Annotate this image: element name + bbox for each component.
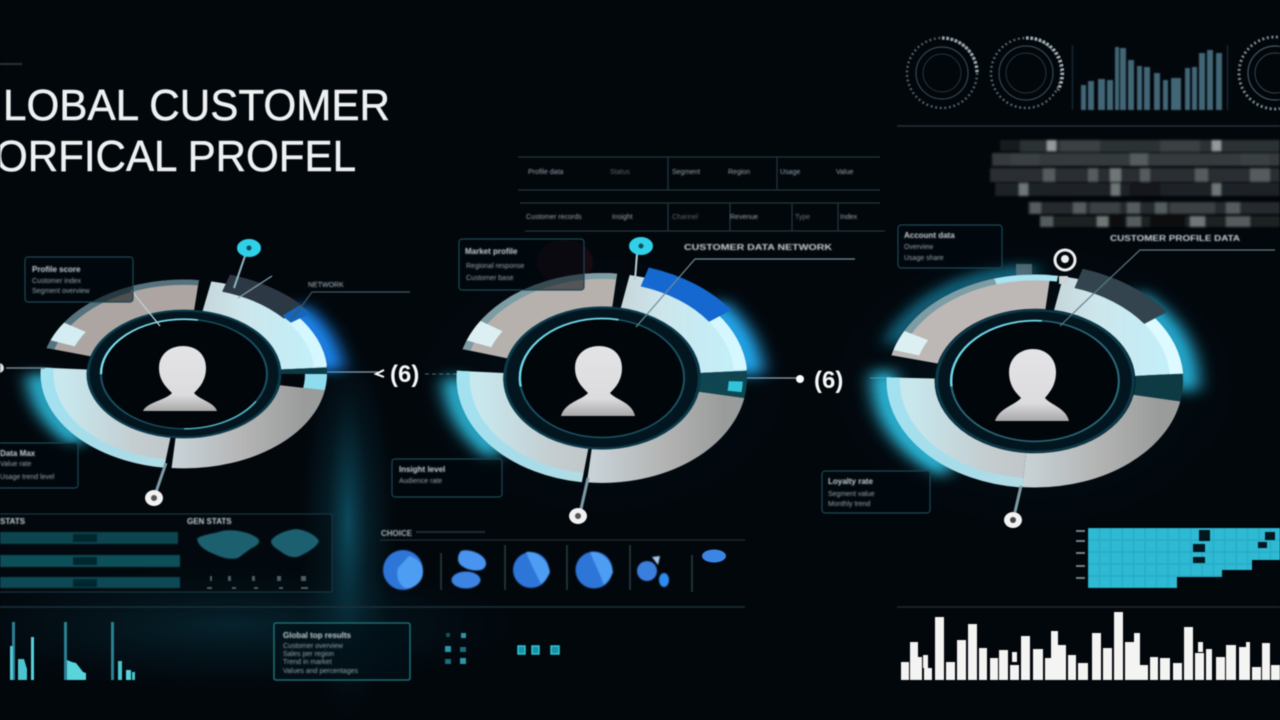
callout: bottom summary: Values and percentages [283, 668, 358, 675]
callout: bottom summary: Trend in market [283, 659, 332, 666]
title: ORFICAL PROFEL [0, 132, 356, 181]
gauge 3 [1239, 37, 1280, 109]
callout: ring 1 top: Segment overview [32, 288, 91, 295]
callout: bottom summary: Global top results [283, 631, 352, 640]
histogram 2 [64, 622, 86, 680]
callout: ring 3 bottom [822, 471, 930, 513]
pie 2 [452, 550, 486, 588]
histogram 3 [111, 622, 135, 680]
callout: bottom summary [274, 623, 410, 680]
centre data table: Index [840, 214, 858, 221]
centre data table: Value [836, 169, 853, 176]
callout: ring 2 top: Market profile [465, 247, 518, 256]
small icon grid [445, 633, 466, 664]
callout: ring 1 bottom [0, 443, 78, 488]
title: LOBAL CUSTOMER [3, 81, 390, 130]
callout: ring 1 bottom: Usage trend level [0, 474, 55, 481]
teal grid chart [1076, 528, 1280, 588]
pie 5 fragments [637, 556, 669, 587]
glow arcs [454, 271, 750, 485]
divider: lower right [897, 606, 1280, 608]
panel: blue segment pies: CHOICE [381, 529, 413, 538]
histogram 1 [10, 622, 34, 680]
centre data table: Insight [612, 214, 633, 221]
glow arcs [38, 278, 330, 470]
top right gauges and bar chart [897, 37, 1280, 126]
pie 3 [513, 552, 550, 588]
label: ring 3 heading: CUSTOMER PROFILE DATA [1110, 234, 1240, 243]
callout: ring 3 top: Usage share [904, 255, 944, 262]
centre data table: Type [795, 214, 810, 221]
callout: ring 2 top: Customer base [466, 275, 514, 282]
callout: ring 1 top: Customer index [32, 278, 82, 285]
callout: ring 2 top: Regional response [466, 263, 524, 270]
world map blobs [197, 529, 319, 559]
small histograms [10, 622, 135, 680]
pie 1 [383, 550, 423, 590]
cyan square icons [518, 646, 559, 654]
centre data table: Revenue [730, 214, 758, 221]
callout: ring 1 top [25, 257, 133, 302]
pins [1004, 250, 1275, 528]
pixel heatmap [990, 140, 1280, 227]
horizontal bars [0, 532, 180, 588]
callout: ring 3 bottom: Monthly trend [828, 501, 871, 508]
panel: demographics bars and map: STATS [0, 517, 26, 526]
pie 6 [702, 550, 726, 562]
callout: ring 3 bottom: Loyalty rate [828, 477, 873, 486]
centre data table: Region [728, 169, 750, 176]
callout: ring 3 bottom: Segment value [828, 491, 875, 498]
label: network: NETWORK [308, 282, 344, 289]
white bar chart [901, 612, 1280, 680]
callout: ring 3 top [898, 225, 1002, 268]
bar chart [1072, 45, 1228, 110]
panel: demographics bars and map: GEN STATS [187, 517, 232, 526]
panel: blue segment pies [380, 529, 745, 592]
person icon [143, 346, 217, 411]
connector: first to second profile: (6) [390, 361, 419, 388]
callout: ring 2 bottom: Insight level [399, 465, 445, 474]
callout: ring 2 top [459, 239, 584, 290]
callout: ring 1 bottom: Data Max [0, 449, 36, 458]
panel: demographics bars and map [0, 514, 332, 592]
label: ring 2 heading: CUSTOMER DATA NETWORK [684, 243, 832, 252]
divider: lower left [0, 606, 745, 608]
gauge 1 [907, 38, 977, 108]
callout: ring 3 top: Overview [904, 244, 934, 251]
connector: second to third profile: (6) [814, 367, 843, 394]
title [0, 63, 390, 181]
callout: ring 1 bottom: Value rate [0, 461, 31, 468]
person icon [995, 349, 1069, 421]
callout: bottom summary: Customer overview [283, 643, 344, 650]
centre data table: Channel [672, 214, 699, 221]
centre data table: Customer records [526, 214, 582, 221]
centre data table: Status [610, 169, 630, 176]
centre data table: Profile data [528, 169, 564, 176]
callout: ring 2 bottom: Audience rate [399, 478, 442, 485]
profile ring 3 [884, 234, 1275, 528]
centre data table: Usage [780, 169, 800, 176]
profile ring 2 [454, 237, 855, 524]
person icon [561, 346, 635, 416]
callout: ring 3 top: Account data [904, 231, 955, 240]
callout: ring 2 bottom [392, 459, 502, 497]
pie 4 [576, 552, 613, 588]
connector: second to third profile [735, 367, 888, 394]
glow arcs [884, 272, 1186, 490]
callout: bottom summary: Sales per region [283, 651, 334, 658]
centre data table [518, 157, 885, 231]
centre data table: Segment [672, 169, 700, 176]
callout: ring 1 top: Profile score [32, 265, 81, 274]
connector: first to second profile [283, 361, 457, 388]
profile ring 1 [0, 239, 410, 506]
gauge 2 [991, 38, 1062, 108]
pins [569, 237, 855, 524]
pins [0, 239, 410, 506]
